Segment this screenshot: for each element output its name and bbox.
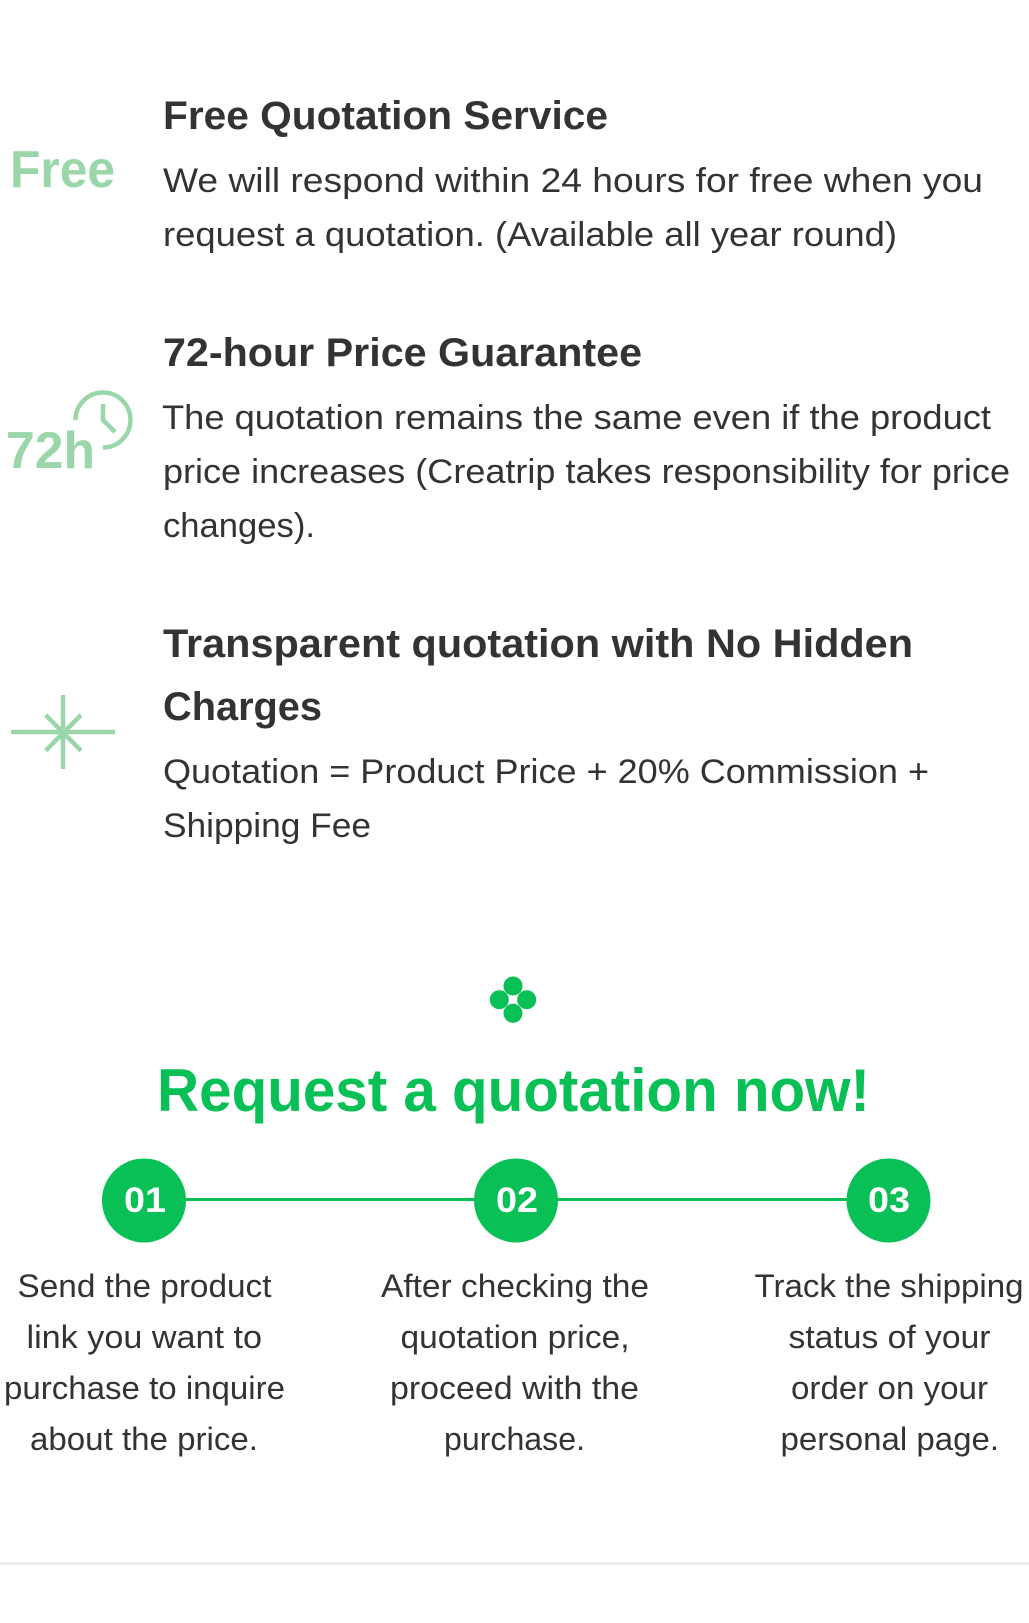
text block: price guarantee description: changes). bbox=[163, 507, 315, 545]
text block: step 3: personal page. bbox=[780, 1421, 999, 1457]
heading: transparent quotation with no hidden charges: Charges bbox=[163, 685, 322, 729]
text block: step 3: order on your bbox=[791, 1370, 988, 1406]
text block: step 3: Track the shipping bbox=[754, 1268, 1024, 1304]
heading: free quotation service: Free Quotation Service bbox=[163, 94, 608, 138]
text block: step 2 bbox=[381, 1268, 649, 1457]
step badge 02: 02 bbox=[496, 1181, 538, 1220]
timeline: three steps bbox=[102, 1158, 930, 1242]
text block: step 1: Send the product bbox=[18, 1268, 272, 1304]
text block: step 2: quotation price, bbox=[400, 1319, 630, 1355]
text block: free quotation description: We will respond within 24 hours for free when you bbox=[163, 162, 983, 200]
text block: step 3: status of your bbox=[788, 1319, 991, 1355]
heading: transparent quotation with no hidden charges: Transparent quotation with No Hidden bbox=[163, 622, 913, 666]
step badge 02 bbox=[474, 1158, 558, 1242]
panel: transparent quotation bbox=[11, 622, 929, 845]
step badge 03: 03 bbox=[868, 1181, 910, 1220]
text block: quotation formula: Quotation = Product Price + 20% Commission + bbox=[163, 753, 929, 791]
heading: 72-hour price guarantee: 72-hour Price Guarantee bbox=[163, 331, 642, 375]
text block: price guarantee description: price increases (Creatrip takes responsibility for price bbox=[163, 453, 1010, 491]
icon: 72h clock: 72h bbox=[6, 422, 95, 480]
step badge 01: 01 bbox=[124, 1181, 166, 1220]
icon: green clover bbox=[490, 976, 536, 1023]
text block: free quotation description bbox=[163, 162, 983, 254]
text block: quotation formula bbox=[163, 753, 929, 845]
text block: step 3 bbox=[754, 1268, 1024, 1457]
text block: step 1: link you want to bbox=[26, 1319, 262, 1355]
icon: 72h clock bbox=[6, 392, 130, 480]
text block: price guarantee description bbox=[162, 399, 1010, 545]
heading: transparent quotation with no hidden charges bbox=[163, 622, 913, 729]
text block: quotation formula: Shipping Fee bbox=[163, 807, 371, 845]
panel: free quotation service bbox=[10, 94, 983, 254]
title: request a quotation now: Request a quotation now! bbox=[157, 1057, 870, 1124]
text block: free quotation description: request a quotation. (Available all year round) bbox=[163, 216, 897, 254]
text block: step 2: After checking the bbox=[381, 1268, 649, 1304]
text block: step 1 bbox=[4, 1268, 285, 1457]
text block: step 1: about the price. bbox=[30, 1421, 258, 1457]
icon: sparkle star bbox=[11, 695, 115, 769]
panel: 72-hour price guarantee bbox=[6, 331, 1010, 545]
icon: free: Free bbox=[10, 141, 115, 199]
step badge 01 bbox=[102, 1158, 186, 1242]
text block: step 1: purchase to inquire bbox=[4, 1370, 285, 1406]
text block: step 2: purchase. bbox=[444, 1421, 585, 1457]
text block: price guarantee description: The quotation remains the same even if the product bbox=[162, 399, 992, 437]
step badge 03 bbox=[846, 1158, 930, 1242]
text block: step 2: proceed with the bbox=[390, 1370, 639, 1406]
connector line bbox=[144, 1198, 889, 1201]
